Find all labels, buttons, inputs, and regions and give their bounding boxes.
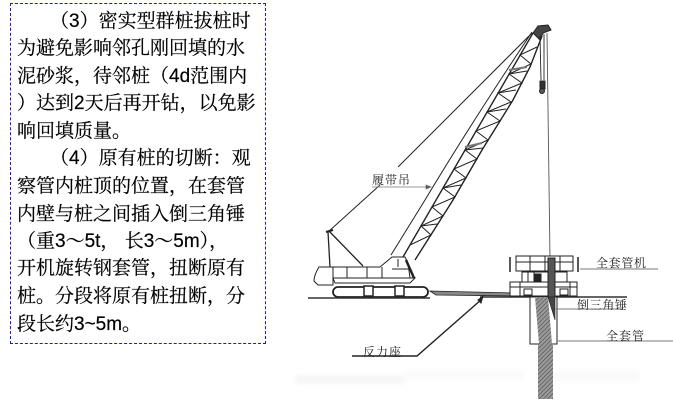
inverted wedge hammer	[548, 297, 555, 320]
boom backstay line	[328, 33, 532, 232]
paragraph 4: 段长约3~5m。	[17, 314, 141, 335]
label: inverted wedge hammer: 倒三角锤	[577, 297, 627, 312]
ground line	[308, 297, 627, 298]
label: crawler crane: 履带吊	[372, 172, 410, 187]
text panel: pile extraction notes	[10, 3, 266, 344]
casing machine leader	[580, 268, 658, 270]
crane mast	[326, 230, 363, 267]
label: reaction base: 反力座	[363, 344, 401, 359]
paragraph 4: （重3～5t， 长3～5m），	[17, 231, 228, 252]
reaction base plate	[430, 291, 516, 296]
paragraph 3: 泥砂浆，待邻桩（4d范围内	[17, 66, 247, 87]
hoist rope	[547, 33, 550, 259]
paragraph 3: ）达到2天后再开钻，以免影	[17, 93, 256, 114]
hook	[540, 34, 545, 94]
paragraph 4: 察管内桩顶的位置，在套管	[17, 176, 245, 197]
existing pile	[535, 297, 553, 399]
crawler track	[333, 286, 428, 297]
paragraph 4: 桩。分段将原有桩扭断，分	[17, 286, 245, 307]
paragraph 4: （4）原有桩的切断：观	[50, 148, 251, 169]
paragraph 4: 内壁与桩之间插入倒三角锤	[17, 204, 245, 225]
casing pipe	[530, 297, 557, 344]
crane body	[314, 257, 415, 285]
paragraph 4: 开机旋转钢套管，扭断原有	[17, 258, 245, 279]
reaction base leader	[352, 296, 483, 356]
paragraph 3: 为避免影响邻孔刚回填的水	[17, 38, 245, 59]
wedge leader	[555, 308, 623, 310]
crawler crane leader arrow	[372, 185, 431, 189]
full casing machine	[510, 256, 578, 297]
casing leader	[558, 340, 673, 342]
crane boom	[391, 25, 551, 260]
scan noise band	[295, 372, 640, 384]
paragraph 3: （3）密实型群桩拔桩时	[50, 11, 251, 32]
paragraph 3	[17, 10, 256, 142]
panel border	[10, 3, 266, 344]
paragraph 3: 响回填质量。	[17, 121, 131, 142]
label: casing pipe: 全套管	[606, 328, 644, 343]
paragraph 4	[17, 148, 251, 335]
label: full casing machine: 全套管机	[596, 255, 646, 270]
